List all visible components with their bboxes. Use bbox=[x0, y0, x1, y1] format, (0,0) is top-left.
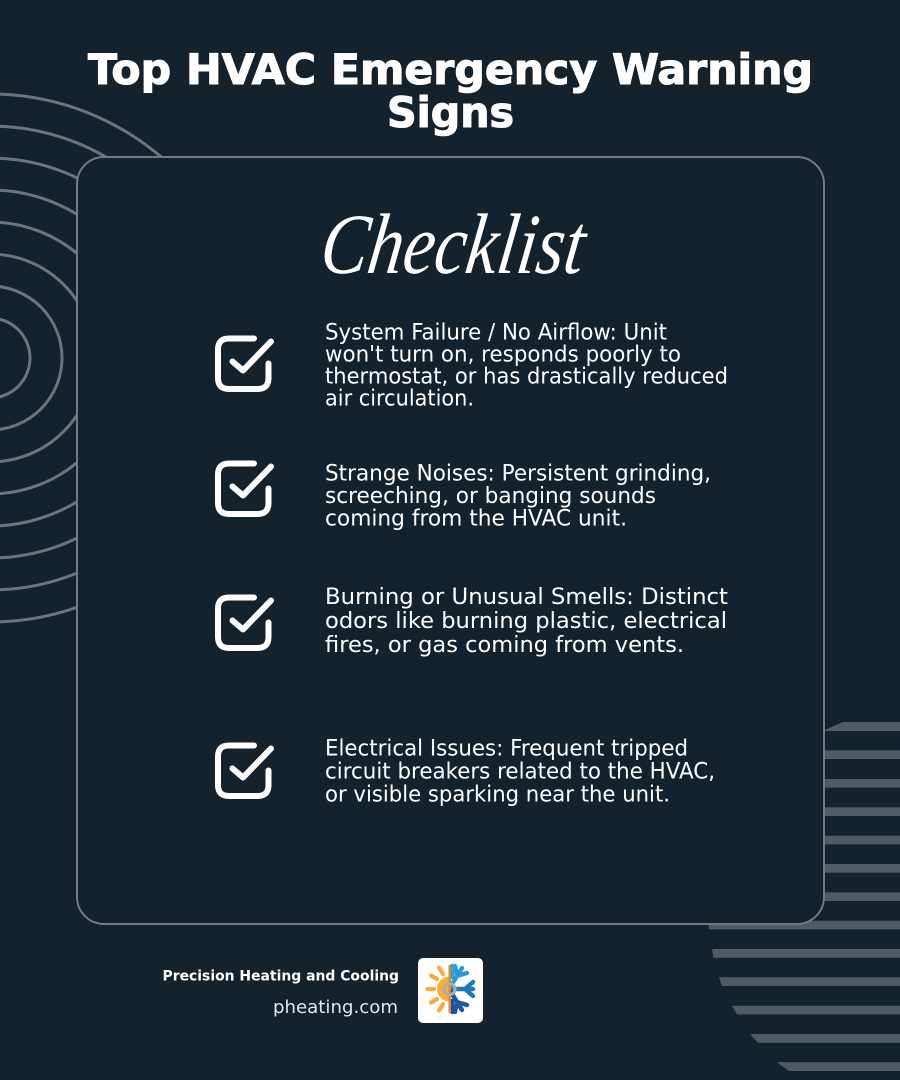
footer: website: pheating.com bbox=[273, 997, 398, 1018]
text: electrical issues: Electrical Issues: Frequent tripped bbox=[325, 736, 688, 762]
decoration: striped circle bbox=[708, 722, 900, 1071]
text: electrical issues bbox=[325, 736, 715, 808]
title: Top HVAC Emergency Warning bbox=[88, 45, 813, 94]
heading: Checklist: Checklist bbox=[315, 196, 593, 292]
title: Signs bbox=[387, 88, 514, 137]
text: system failure: System Failure / No Airflow: Unit bbox=[325, 320, 667, 346]
checklist item 3 bbox=[218, 584, 728, 658]
icon: checkbox 2 bbox=[218, 464, 271, 514]
checklist item 4 bbox=[218, 736, 715, 808]
text: strange noises bbox=[325, 460, 711, 532]
text: system failure: thermostat, or has drastically reduced bbox=[325, 364, 728, 390]
text: electrical issues: circuit breakers related to the HVAC, bbox=[325, 758, 715, 784]
icon: checkbox 1 bbox=[218, 338, 271, 389]
text: strange noises: coming from the HVAC unit. bbox=[325, 506, 627, 532]
panel: checklist card bbox=[77, 157, 824, 924]
checklist item 2 bbox=[218, 460, 711, 532]
icon: checkbox 4 bbox=[218, 746, 271, 796]
text: burning smells: Burning or Unusual Smells: Distinct bbox=[325, 584, 728, 610]
checklist item 1 bbox=[218, 320, 728, 412]
text: burning smells: fires, or gas coming from vents. bbox=[325, 632, 684, 658]
text: burning smells: odors like burning plastic, electrical bbox=[325, 608, 727, 634]
text: strange noises: screeching, or banging sounds bbox=[325, 483, 656, 509]
text: system failure: air circulation. bbox=[325, 386, 474, 412]
text: strange noises: Strange Noises: Persistent grinding, bbox=[325, 460, 711, 486]
text: electrical issues: or visible sparking near the unit. bbox=[325, 782, 670, 808]
decoration: concentric rings bbox=[0, 94, 254, 622]
footer: company name: Precision Heating and Cooling bbox=[162, 968, 399, 984]
title bbox=[88, 45, 813, 137]
logo: sun and snowflake bbox=[418, 958, 483, 1023]
text: system failure: won't turn on, responds poorly to bbox=[325, 342, 681, 368]
text: burning smells bbox=[325, 584, 728, 658]
icon: checkbox 3 bbox=[218, 598, 271, 648]
text: system failure bbox=[325, 320, 728, 412]
